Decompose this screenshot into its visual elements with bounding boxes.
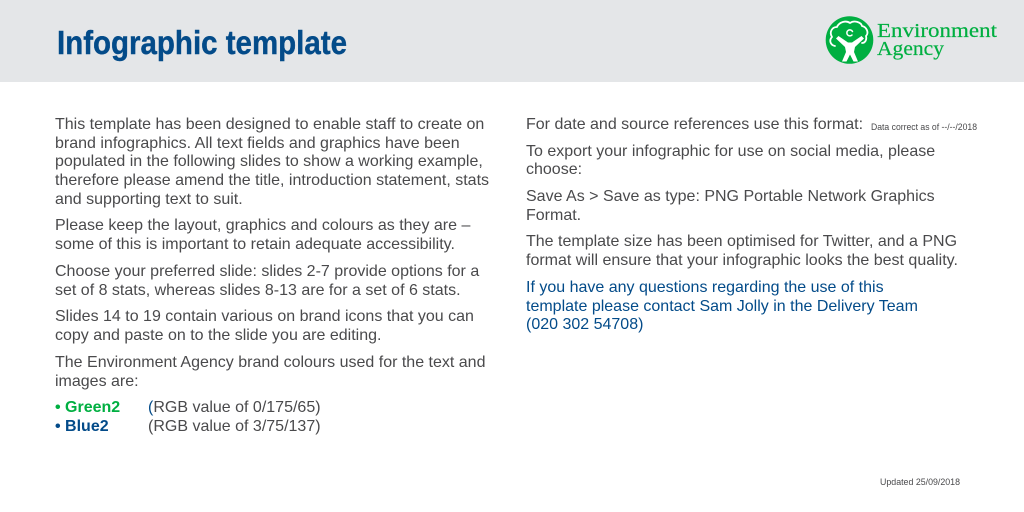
contact callout: If you have any questions regarding the use of this — [526, 279, 884, 296]
colour list: (RGB value of 3/75/137) — [148, 418, 321, 435]
paragraph: template size: The template size has been optimised for Twitter, and a PNG — [526, 233, 957, 250]
header band — [0, 0, 1024, 82]
paragraph: save as: Format. — [526, 207, 581, 224]
logo: Environment Agency — [826, 16, 997, 64]
title: Infographic template — [57, 25, 347, 62]
paragraph: brand icons: Slides 14 to 19 contain various on brand icons that you can — [55, 308, 474, 325]
paragraph: brand colours — [55, 354, 485, 390]
logo wordmark: Environment — [877, 20, 997, 42]
paragraph: template purpose: This template has been designed to enable staff to create on — [55, 116, 484, 133]
updated date note: Updated 25/09/2018 — [880, 477, 960, 487]
paragraph: template purpose — [55, 116, 489, 208]
paragraph: export — [526, 143, 935, 178]
paragraph: export: To export your infographic for use on social media, please — [526, 143, 935, 160]
paragraph: save as — [526, 188, 935, 224]
paragraph: brand colours: The Environment Agency brand colours used for the text and — [55, 354, 485, 371]
paragraph: keep layout: Please keep the layout, graphics and colours as they are – — [55, 217, 470, 234]
colour list: • Blue2 — [55, 418, 109, 435]
paragraph: template size: format will ensure that your infographic looks the best quality. — [526, 252, 958, 269]
paragraph: brand icons: copy and paste on to the slide you are editing. — [55, 327, 381, 344]
paragraph: template purpose: brand infographics. All text fields and graphics have been — [55, 135, 460, 152]
paragraph: template purpose: and supporting text to suit. — [55, 191, 243, 208]
paragraph: brand icons — [55, 308, 474, 344]
paragraph: choose slide: Choose your preferred slide: slides 2-7 provide options for a — [55, 263, 479, 280]
logo wordmark: Agency — [877, 38, 945, 60]
colour list — [55, 399, 321, 435]
date and source format: For date and source references use this format: — [526, 116, 863, 133]
paragraph: save as: Save As > Save as type: PNG Portable Network Graphics — [526, 188, 935, 205]
contact callout: (020 302 54708) — [526, 316, 643, 333]
paragraph: template purpose: therefore please amend the title, introduction statement, stats — [55, 172, 489, 189]
paragraph: export: choose: — [526, 161, 582, 178]
text block: left column introduction — [55, 116, 489, 435]
paragraph: template purpose: populated in the following slides to show a working example, — [55, 153, 483, 170]
icon: tree and person roundel — [826, 16, 873, 64]
date and source format: Data correct as of --/--/2018 — [871, 122, 977, 132]
paragraph: keep layout — [55, 217, 470, 253]
colour list: (RGB value of 0/175/65) — [148, 399, 321, 416]
colour list: • Green2 — [55, 399, 120, 416]
text block: right column export guidance — [526, 116, 977, 333]
paragraph: keep layout: some of this is important to retain adequate accessibility. — [55, 236, 455, 253]
paragraph: brand colours: images are: — [55, 373, 139, 390]
logo wordmark — [877, 20, 997, 60]
contact callout: template please contact Sam Jolly in the Delivery Team — [526, 298, 918, 315]
contact callout — [526, 279, 918, 333]
paragraph: choose slide: set of 8 stats, whereas slides 8-13 are for a set of 6 stats. — [55, 282, 461, 299]
paragraph: choose slide — [55, 263, 479, 299]
paragraph: template size — [526, 233, 958, 269]
